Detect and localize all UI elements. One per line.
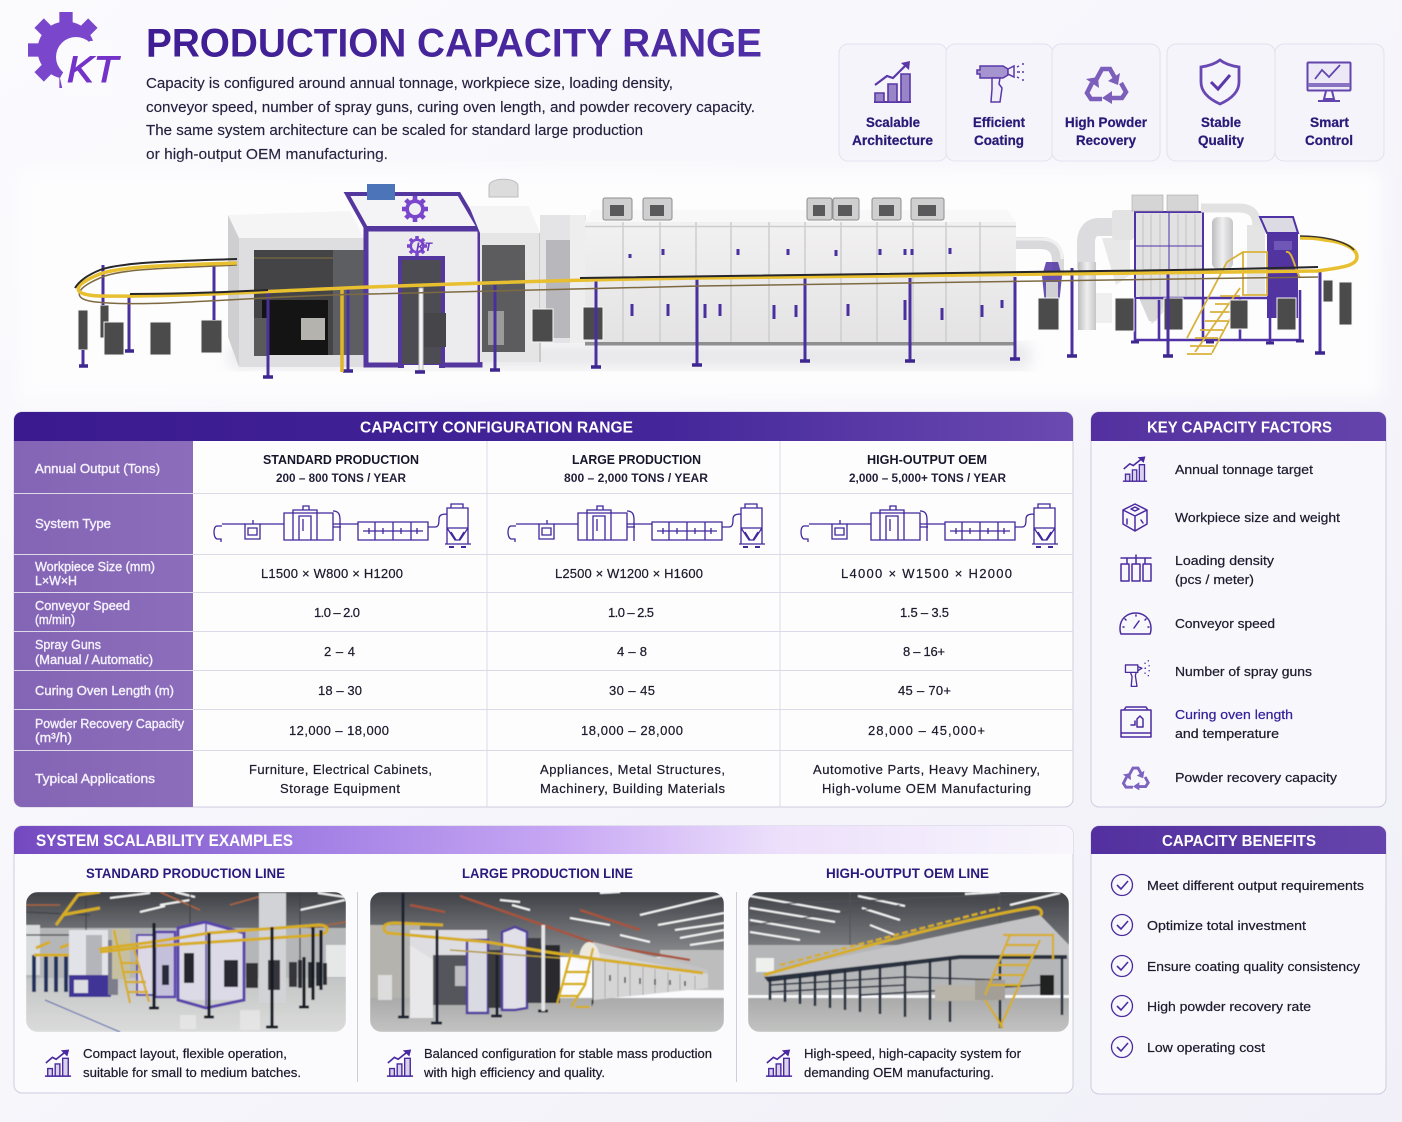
description: demanding OEM manufacturing. <box>804 1065 994 1080</box>
card labels: Smart <box>1310 114 1349 130</box>
column headers: 2,000 – 5,000+ TONS / YEAR <box>849 471 1006 485</box>
card labels: Architecture <box>852 132 933 148</box>
factor labels <box>1175 462 1340 785</box>
table values: Appliances, Metal Structures, <box>540 762 725 777</box>
column headers: STANDARD PRODUCTION <box>263 452 419 467</box>
powder recovery system <box>1078 195 1304 343</box>
feature cards row <box>839 44 1384 161</box>
factor labels: Annual tonnage target <box>1175 462 1313 477</box>
card labels: Scalable <box>866 114 920 130</box>
table values: L2500 × W1200 × H1600 <box>555 566 703 581</box>
factor labels: Powder recovery capacity <box>1175 770 1338 785</box>
icon: speed gauge <box>1120 613 1151 634</box>
description <box>766 1046 1022 1080</box>
icon: spray gun <box>977 64 1024 102</box>
left booth <box>228 211 364 367</box>
table values: 28,000 – 45,000+ <box>868 723 985 738</box>
row labels: (Manual / Automatic) <box>35 652 153 667</box>
benefits heading: CAPACITY BENEFITS <box>1162 833 1316 850</box>
sub-heading: STANDARD PRODUCTION LINE <box>86 865 285 881</box>
icon: shield check <box>1201 60 1239 104</box>
benefit list <box>1112 874 1365 1058</box>
column headers: LARGE PRODUCTION <box>572 452 701 467</box>
panel: capacity configuration table <box>14 412 1073 807</box>
access stairs <box>1187 252 1300 354</box>
table values: 1.5 – 3.5 <box>900 605 949 620</box>
factor labels: Loading density <box>1175 553 1275 568</box>
photo: large line <box>370 892 724 1032</box>
benefit list: Ensure coating quality consistency <box>1147 959 1361 974</box>
row labels: Powder Recovery Capacity <box>35 716 184 731</box>
description: Compact layout, flexible operation, <box>83 1046 287 1061</box>
factor labels: Conveyor speed <box>1175 616 1275 631</box>
table values: Furniture, Electrical Cabinets, <box>249 762 432 777</box>
central purple spray booth: KT <box>416 240 434 254</box>
intro text block <box>146 75 755 163</box>
table values: L4000 × W1500 × H2000 <box>841 566 1012 581</box>
icon: curing oven <box>1121 707 1151 737</box>
card labels: Efficient <box>973 114 1025 130</box>
overhead conveyor rail <box>75 236 1357 304</box>
card labels: Recovery <box>1076 132 1136 148</box>
table values <box>249 566 1040 796</box>
curing oven <box>585 210 1016 346</box>
factor labels: Curing oven length <box>1175 707 1293 722</box>
intro text block: The same system architecture can be scaled for standard large production <box>146 122 643 139</box>
intro text block: conveyor speed, number of spray guns, curing oven length, and powder recovery capacity. <box>146 99 755 116</box>
table heading: CAPACITY CONFIGURATION RANGE <box>360 420 633 436</box>
photo: OEM line <box>748 892 1069 1032</box>
panel: capacity benefits <box>1091 826 1386 1094</box>
hero: powder coating line illustration <box>20 170 1382 398</box>
icon: spray gun <box>1125 661 1150 686</box>
panel: system scalability examples <box>14 826 1073 1093</box>
benefit list: Low operating cost <box>1147 1040 1265 1055</box>
logo <box>28 12 121 96</box>
conveyor posts <box>79 265 1325 377</box>
icon: tonnage chart <box>1123 456 1147 481</box>
factor labels: Workpiece size and weight <box>1175 510 1340 525</box>
description: with high efficiency and quality. <box>423 1065 605 1080</box>
card labels: High Powder <box>1065 114 1148 130</box>
icon: scalable chart <box>874 61 911 102</box>
table values: Storage Equipment <box>280 781 400 796</box>
row labels <box>35 461 184 786</box>
benefit list: Optimize total investment <box>1147 918 1306 933</box>
table values: 2 – 4 <box>324 644 355 659</box>
photo: standard line <box>26 892 346 1032</box>
table values: Automotive Parts, Heavy Machinery, <box>813 762 1040 777</box>
sub-heading: LARGE PRODUCTION LINE <box>462 865 633 881</box>
column headers <box>263 452 1006 485</box>
icon: workpiece cube <box>1123 504 1147 531</box>
panel: key capacity factors <box>1091 412 1386 807</box>
description <box>387 1046 712 1080</box>
exhaust duct <box>1016 239 1062 305</box>
table values: High-volume OEM Manufacturing <box>822 781 1031 796</box>
factor labels: and temperature <box>1175 726 1279 741</box>
example: large production line <box>370 865 724 1080</box>
icon: loading density <box>1121 555 1151 581</box>
row labels: L×W×H <box>35 573 77 588</box>
example: standard production line <box>26 865 346 1080</box>
row labels: (m/min) <box>35 612 75 627</box>
right booth <box>469 179 540 362</box>
icon: recovery <box>1123 768 1148 790</box>
card labels: Coating <box>974 132 1024 148</box>
oven roof units <box>603 198 944 220</box>
table values: Machinery, Building Materials <box>540 781 726 796</box>
card labels: Stable <box>1201 114 1241 130</box>
factor labels: (pcs / meter) <box>1175 572 1254 587</box>
row labels: System Type <box>35 516 111 531</box>
card labels <box>852 114 1353 148</box>
description: High-speed, high-capacity system for <box>804 1046 1022 1061</box>
table values: 1.0 – 2.0 <box>314 605 360 620</box>
icon: monitor <box>1308 62 1350 101</box>
row labels: Conveyor Speed <box>35 598 130 613</box>
row labels: Workpiece Size (mm) <box>35 559 155 574</box>
example: high-output OEM line <box>748 865 1069 1080</box>
table values: 30 – 45 <box>609 683 655 698</box>
row labels: Annual Output (Tons) <box>35 461 160 476</box>
scalability heading: SYSTEM SCALABILITY EXAMPLES <box>36 831 293 850</box>
description: Balanced configuration for stable mass production <box>424 1046 712 1061</box>
row labels: (m³/h) <box>35 730 72 745</box>
title: PRODUCTION CAPACITY RANGE <box>146 22 762 66</box>
factor labels: Number of spray guns <box>1175 664 1313 679</box>
column headers: HIGH-OUTPUT OEM <box>867 452 987 467</box>
column headers: 200 – 800 TONS / YEAR <box>276 471 406 485</box>
card labels: Control <box>1305 132 1353 148</box>
table values: 45 – 70+ <box>898 683 951 698</box>
logo: KT <box>67 49 121 90</box>
table values: 8 – 16+ <box>903 644 945 659</box>
intro text block: Capacity is configured around annual tonnage, workpiece size, loading density, <box>146 75 673 92</box>
card labels: Quality <box>1198 132 1244 148</box>
central purple spray booth <box>347 184 480 369</box>
row labels: Typical Applications <box>35 771 156 786</box>
row labels: Curing Oven Length (m) <box>35 683 174 698</box>
floor shadow <box>230 345 1030 367</box>
dividers <box>358 892 736 1082</box>
benefit list: High powder recovery rate <box>1147 999 1311 1014</box>
row labels: Spray Guns <box>35 637 101 652</box>
table values: 18 – 30 <box>318 683 362 698</box>
table values: 12,000 – 18,000 <box>289 723 389 738</box>
connector section <box>540 215 586 343</box>
sub-heading: HIGH-OUTPUT OEM LINE <box>826 865 989 881</box>
table values: 18,000 – 28,000 <box>581 723 683 738</box>
hanging workpieces <box>78 280 1352 355</box>
column headers: 800 – 2,000 TONS / YEAR <box>564 471 708 485</box>
factors heading: KEY CAPACITY FACTORS <box>1147 420 1332 436</box>
table values: 1.0 – 2.5 <box>608 605 654 620</box>
intro text block: or high-output OEM manufacturing. <box>146 146 388 163</box>
table values: L1500 × W800 × H1200 <box>261 566 403 581</box>
table values: 4 – 8 <box>617 644 647 659</box>
description <box>45 1046 301 1080</box>
description: suitable for small to medium batches. <box>83 1065 301 1080</box>
icon: powder recycle <box>1086 69 1126 104</box>
benefit list: Meet different output requirements <box>1147 878 1365 893</box>
system type diagrams <box>214 504 1058 548</box>
